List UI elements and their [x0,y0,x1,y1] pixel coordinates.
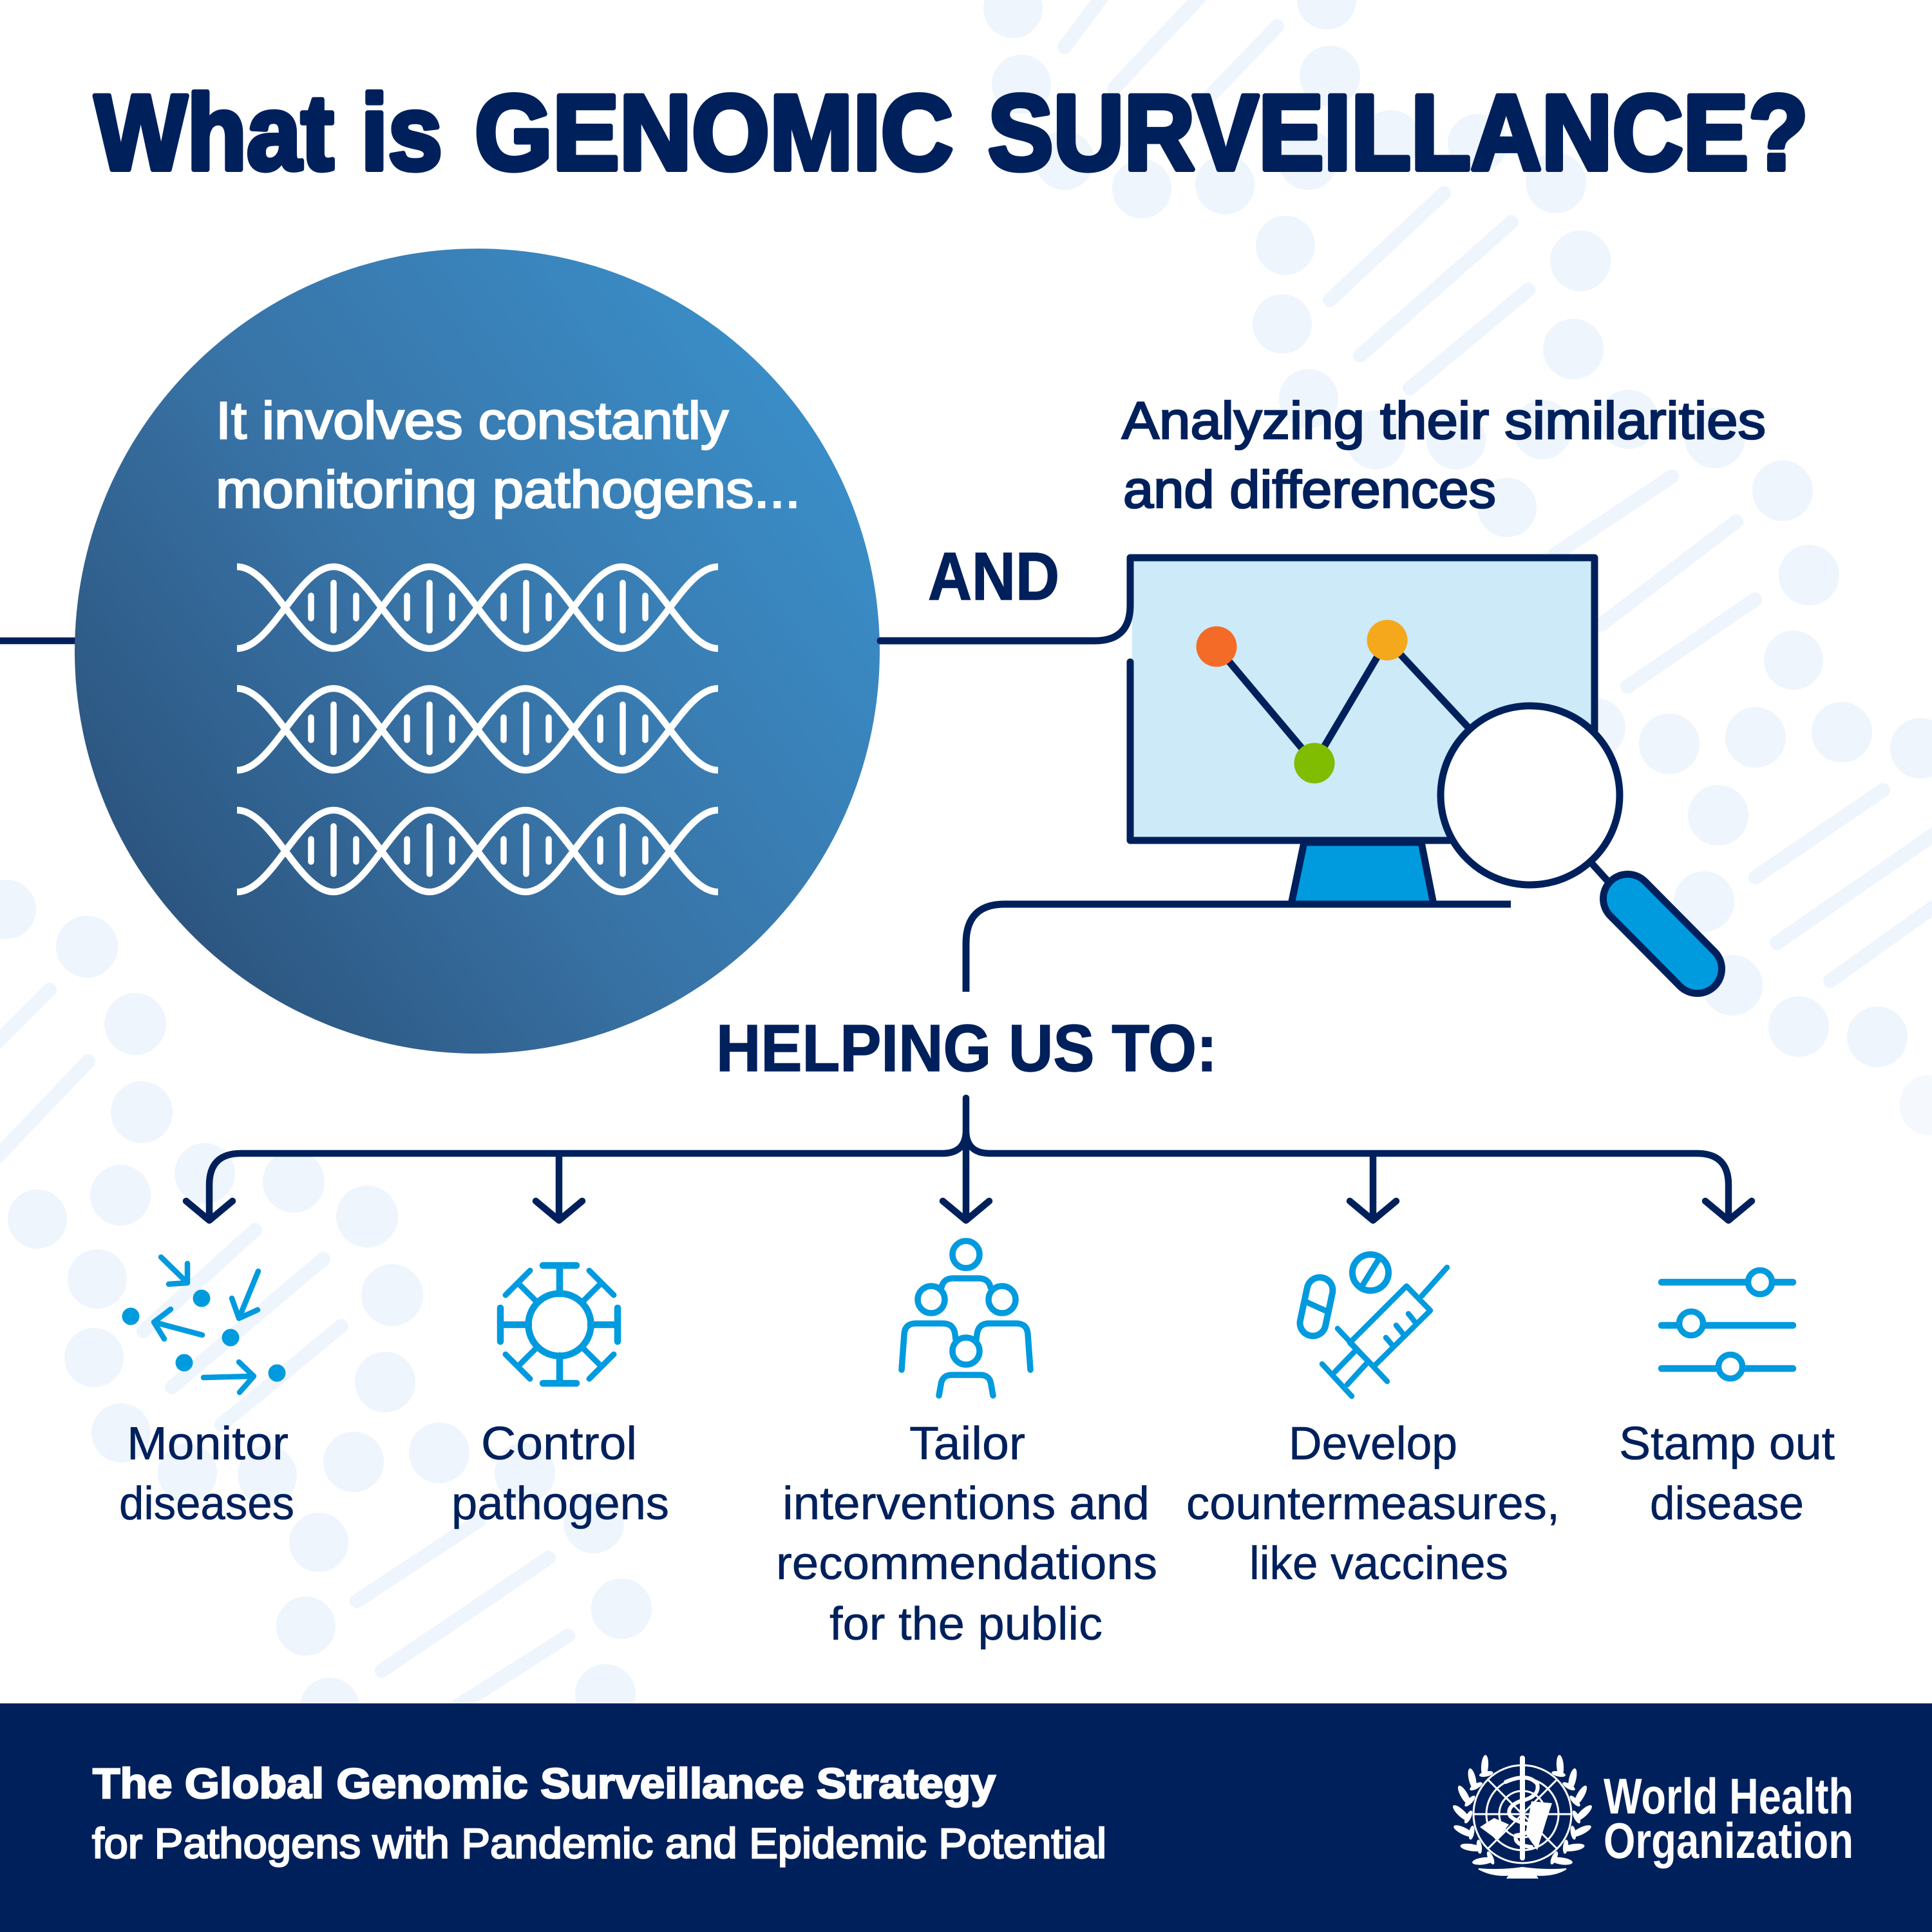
icon: stamp out disease sliders [1662,1270,1793,1378]
WHO wordmark: Organization [1604,1812,1853,1869]
label: stamp out disease: disease [1650,1478,1804,1530]
label: monitor diseases [119,1418,294,1530]
icon: countermeasures syringe and pills [1298,1255,1447,1396]
heading: helping us to: HELPING US TO: [716,1011,1217,1085]
footer band [0,1703,1932,1932]
icon: computer with chart and magnifier [880,558,1698,969]
label: monitor diseases: Monitor [127,1418,289,1470]
icon: tailor interventions people [902,1241,1030,1396]
footer text: The Global Genomic Surveillance Strategy [93,1759,996,1807]
connector line: left of circle [0,638,84,644]
icon: DNA strand 2 [237,688,718,770]
magnifier handle [1628,899,1698,969]
magnifier neck [1592,864,1610,884]
icon: control pathogens virus [500,1265,618,1383]
chart line [1217,640,1472,763]
label: tailor interventions [776,1418,1157,1650]
WHO wordmark [1604,1768,1853,1869]
analyzing text [1122,392,1766,519]
globe [1473,1765,1571,1863]
wreath [1451,1755,1594,1866]
panel: monitoring circle [75,249,880,1054]
label: monitor diseases: diseases [119,1478,294,1530]
circle text: monitoring pathogens... [216,460,800,519]
label: tailor interventions: Tailor [909,1418,1025,1470]
icon: DNA strand 1 [237,567,718,649]
label: stamp out disease [1619,1418,1835,1530]
title: GENOMIC [475,73,953,193]
monitor stand [1291,842,1434,904]
label: tailor interventions: for the public [829,1598,1103,1650]
label: develop countermeasures: countermeasures, [1186,1478,1560,1530]
footer text: for Pathogens with Pandemic and Epidemic Potential [92,1819,1106,1867]
icon: DNA strand 3 [237,810,718,892]
connector and monitor frame [880,558,1595,840]
analyzing text: and differences [1123,460,1496,519]
label: tailor interventions: interventions and [782,1478,1150,1530]
ribbon [1479,1868,1566,1879]
title [95,73,1808,193]
label: develop countermeasures: like vaccines [1249,1538,1508,1589]
title: SURVEILLANCE? [988,73,1808,193]
label: control pathogens [451,1418,669,1530]
label: develop countermeasures [1186,1418,1560,1589]
label: tailor interventions: recommendations [776,1538,1157,1589]
connector to helping us [966,904,1511,992]
label: stamp out disease: Stamp out [1619,1418,1835,1470]
circle text: It involves constantly [216,392,728,450]
WHO wordmark: World Health [1604,1768,1853,1824]
analyzing text: Analyzing their similarities [1122,392,1766,450]
continents [1480,1801,1552,1850]
staff and serpent [1506,1758,1538,1858]
label: control pathogens: Control [481,1418,637,1470]
AND label: AND [928,539,1059,614]
magnifier lens [1441,706,1620,885]
arrow tree [186,1098,1752,1220]
circle text [216,392,800,519]
label: control pathogens: pathogens [451,1478,669,1530]
chart points [1197,620,1408,783]
footer text [92,1759,1106,1867]
title: What is [95,73,442,193]
icon: monitor diseases [122,1257,286,1392]
label: develop countermeasures: Develop [1289,1418,1457,1470]
WHO emblem [1451,1755,1594,1879]
